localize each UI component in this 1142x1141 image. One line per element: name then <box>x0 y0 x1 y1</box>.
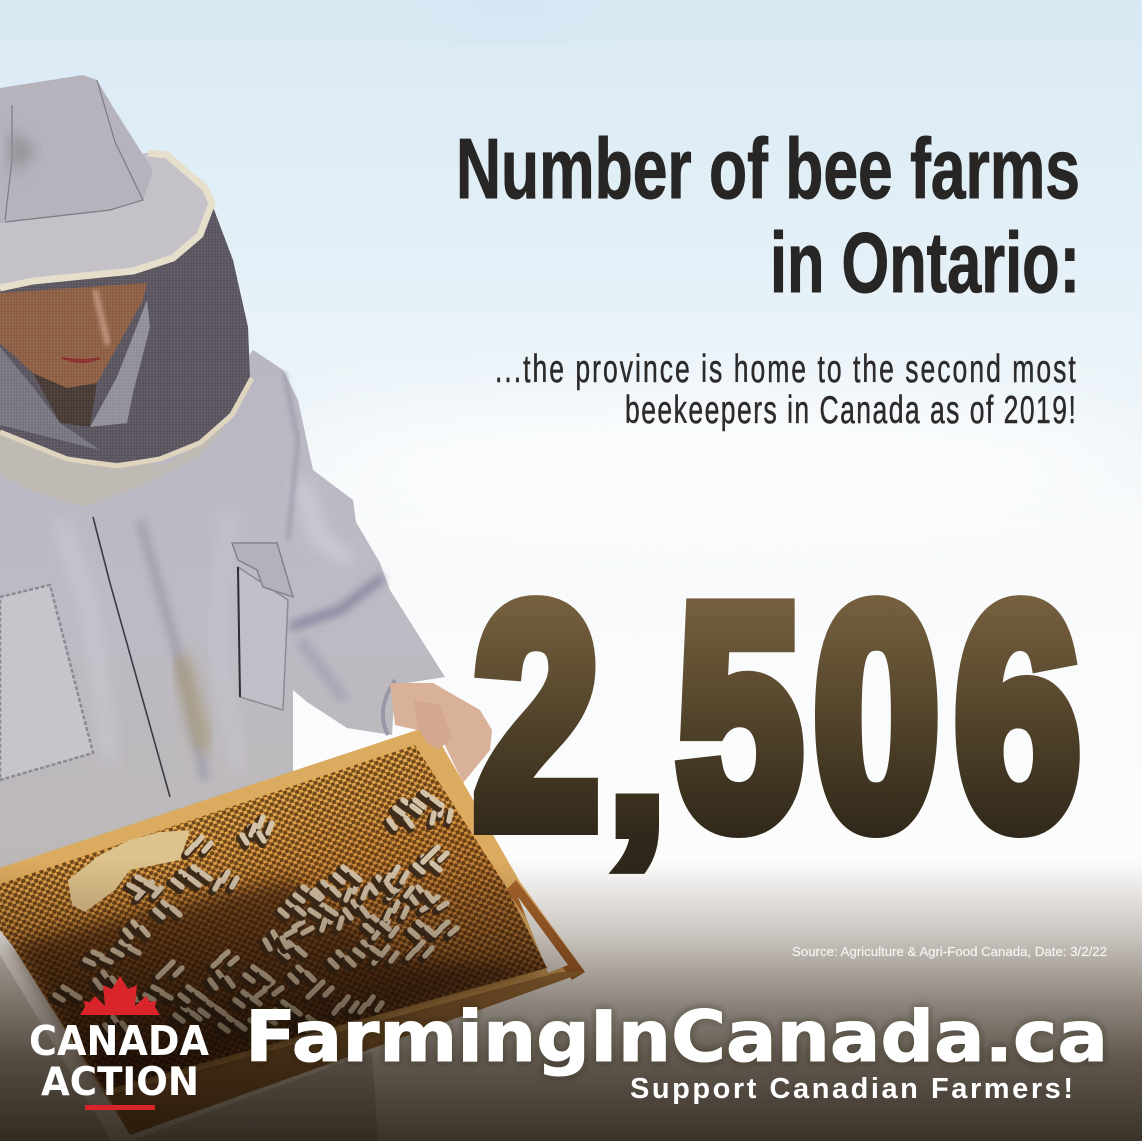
face highlight <box>95 290 108 345</box>
suit shading and folds <box>60 372 395 797</box>
frame bottom bar <box>108 972 585 1135</box>
tagline: Support Canadian Farmers! <box>630 1073 1073 1105</box>
lower suit below frame <box>0 955 378 1141</box>
big number 2,506: 5 <box>677 543 802 891</box>
big number 2,506: , <box>606 629 668 881</box>
frame outer bars <box>0 728 585 1135</box>
lower left collar mesh <box>0 347 100 450</box>
face behind mesh <box>0 283 147 388</box>
comb surface <box>0 745 547 1090</box>
Canada Action logo <box>29 976 209 1110</box>
big number 2,506: 2 <box>474 543 599 891</box>
frame right bar <box>506 880 585 980</box>
crown fold shadow <box>10 130 35 175</box>
hat brim <box>0 153 213 290</box>
honeycomb frame <box>0 728 585 1135</box>
logo red bar <box>85 1105 155 1110</box>
comb cells <box>0 745 547 1090</box>
source note: Source: Agriculture & Agri-Food Canada, Date: 3/2/22 <box>792 944 1107 959</box>
hat rim trim <box>0 153 212 288</box>
hat crown seam <box>5 80 143 222</box>
subtitle: ...the province is home to the second most <box>495 348 1076 391</box>
neck shadow <box>33 373 97 427</box>
icon: maple leaf <box>80 976 160 1015</box>
big number 2,506: 0 <box>814 543 939 891</box>
hat crown <box>0 75 153 223</box>
hand <box>390 683 492 783</box>
big number 2,506: 6 <box>955 543 1080 891</box>
open gap inside frame <box>518 897 568 973</box>
logo wordmark <box>29 1017 209 1105</box>
thumb on frame corner <box>414 700 452 750</box>
mouth <box>62 358 100 362</box>
right pocket <box>232 543 293 710</box>
left chest pocket <box>0 585 93 780</box>
subtitle <box>495 348 1076 432</box>
veil hem <box>0 378 252 466</box>
mesh texture <box>0 207 250 463</box>
veil mesh <box>0 207 250 463</box>
comb dark lower band <box>12 880 547 1090</box>
website name: FarmingInCanada.ca <box>245 996 1108 1078</box>
capped honey patch <box>68 830 190 912</box>
title <box>456 122 1080 311</box>
beekeeper photo illustration <box>0 75 585 1141</box>
logo wordmark: ACTION <box>41 1060 199 1105</box>
hood collar <box>0 425 228 507</box>
logo wordmark: CANADA <box>29 1017 209 1065</box>
inner collar mesh <box>90 300 150 427</box>
suit body and sleeve <box>0 350 445 870</box>
bees <box>52 792 457 1036</box>
subtitle: beekeepers in Canada as of 2019! <box>625 389 1076 432</box>
bottom dark gradient band <box>0 860 1142 1141</box>
big number 2,506 <box>474 543 1080 891</box>
